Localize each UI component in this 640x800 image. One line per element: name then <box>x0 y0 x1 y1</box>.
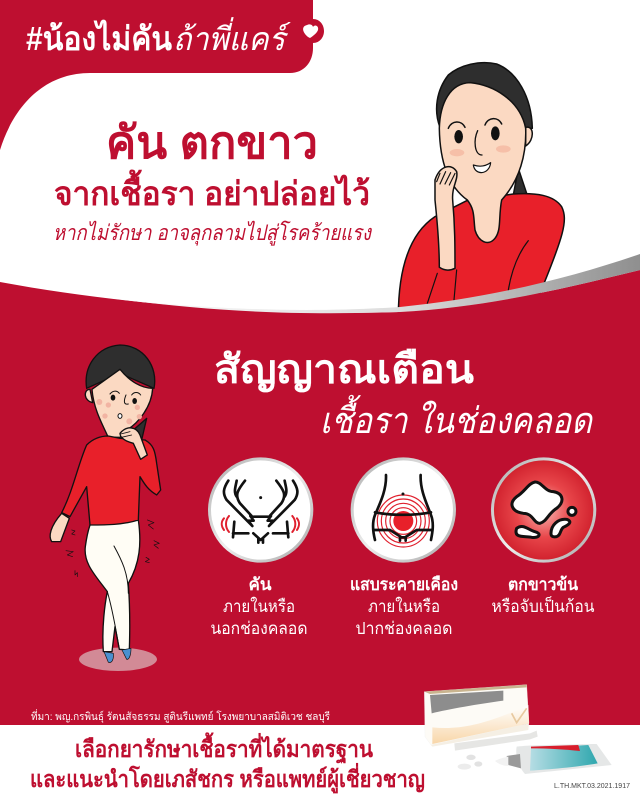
product image <box>424 685 612 774</box>
heading: คัน ตกขาว <box>106 117 318 168</box>
box <box>424 685 529 745</box>
tube <box>516 744 612 774</box>
white footer band <box>0 725 640 800</box>
illustration: smiling woman <box>398 63 564 317</box>
icon: heart <box>303 24 318 38</box>
symptom label 3 <box>492 575 595 616</box>
footer message <box>30 732 425 794</box>
bold term: คัน <box>248 575 272 594</box>
icon: itching <box>208 457 313 563</box>
headline block <box>53 117 372 246</box>
hashtag text: #น้องไม่คัน <box>26 19 172 57</box>
bold term: ตกขาวข้น <box>508 575 578 594</box>
hashtag tab <box>0 0 324 150</box>
warning line: หากไม่รักษา อาจลุกลามไปสู่โรคร้ายแรง <box>53 220 372 246</box>
detail: นอกช่องคลอด <box>210 619 308 638</box>
heading line 2: เชื้อรา ในช่องคลอด <box>320 394 593 441</box>
warning heading <box>214 348 593 441</box>
detail: ปากช่องคลอด <box>356 619 452 638</box>
icon: discharge <box>491 457 596 563</box>
bold term: แสบระคายเคือง <box>350 574 458 594</box>
detail: ภายในหรือ <box>368 596 440 616</box>
pills <box>466 755 476 760</box>
subheading: จากเชื้อรา อย่าปล่อยไว้ <box>54 169 370 212</box>
footer line 2: และแนะนำโดยเภสัชกร หรือแพทย์ผู้เชี่ยวชาญ <box>30 762 425 794</box>
red lower background <box>0 270 640 800</box>
footer line 1: เลือกยารักษาเชื้อราที่ได้มาตรฐาน <box>75 732 373 764</box>
heading line 1: สัญญาณเตือน <box>214 348 474 393</box>
detail: ภายในหรือ <box>223 596 295 616</box>
detail: หรือจับเป็นก้อน <box>492 595 595 616</box>
symptom label 1 <box>210 575 308 638</box>
illustration: worried woman <box>50 345 161 671</box>
symptom label 2 <box>350 574 458 638</box>
silver curved band <box>100 254 640 313</box>
icon: irritation <box>351 457 456 563</box>
floor shadow <box>79 648 157 671</box>
source note: ที่มา: พญ.กรพินธุ์ รัตนสัจธรรม สูตินรีแพทย์ โรงพยาบาลสมิติเวช ชลบุรี <box>31 709 330 723</box>
applicator <box>454 731 538 751</box>
hashtag italic text: ถ้าพี่แคร์ <box>173 17 291 57</box>
document code: L.TH.MKT.03.2021.1917 <box>554 783 630 790</box>
